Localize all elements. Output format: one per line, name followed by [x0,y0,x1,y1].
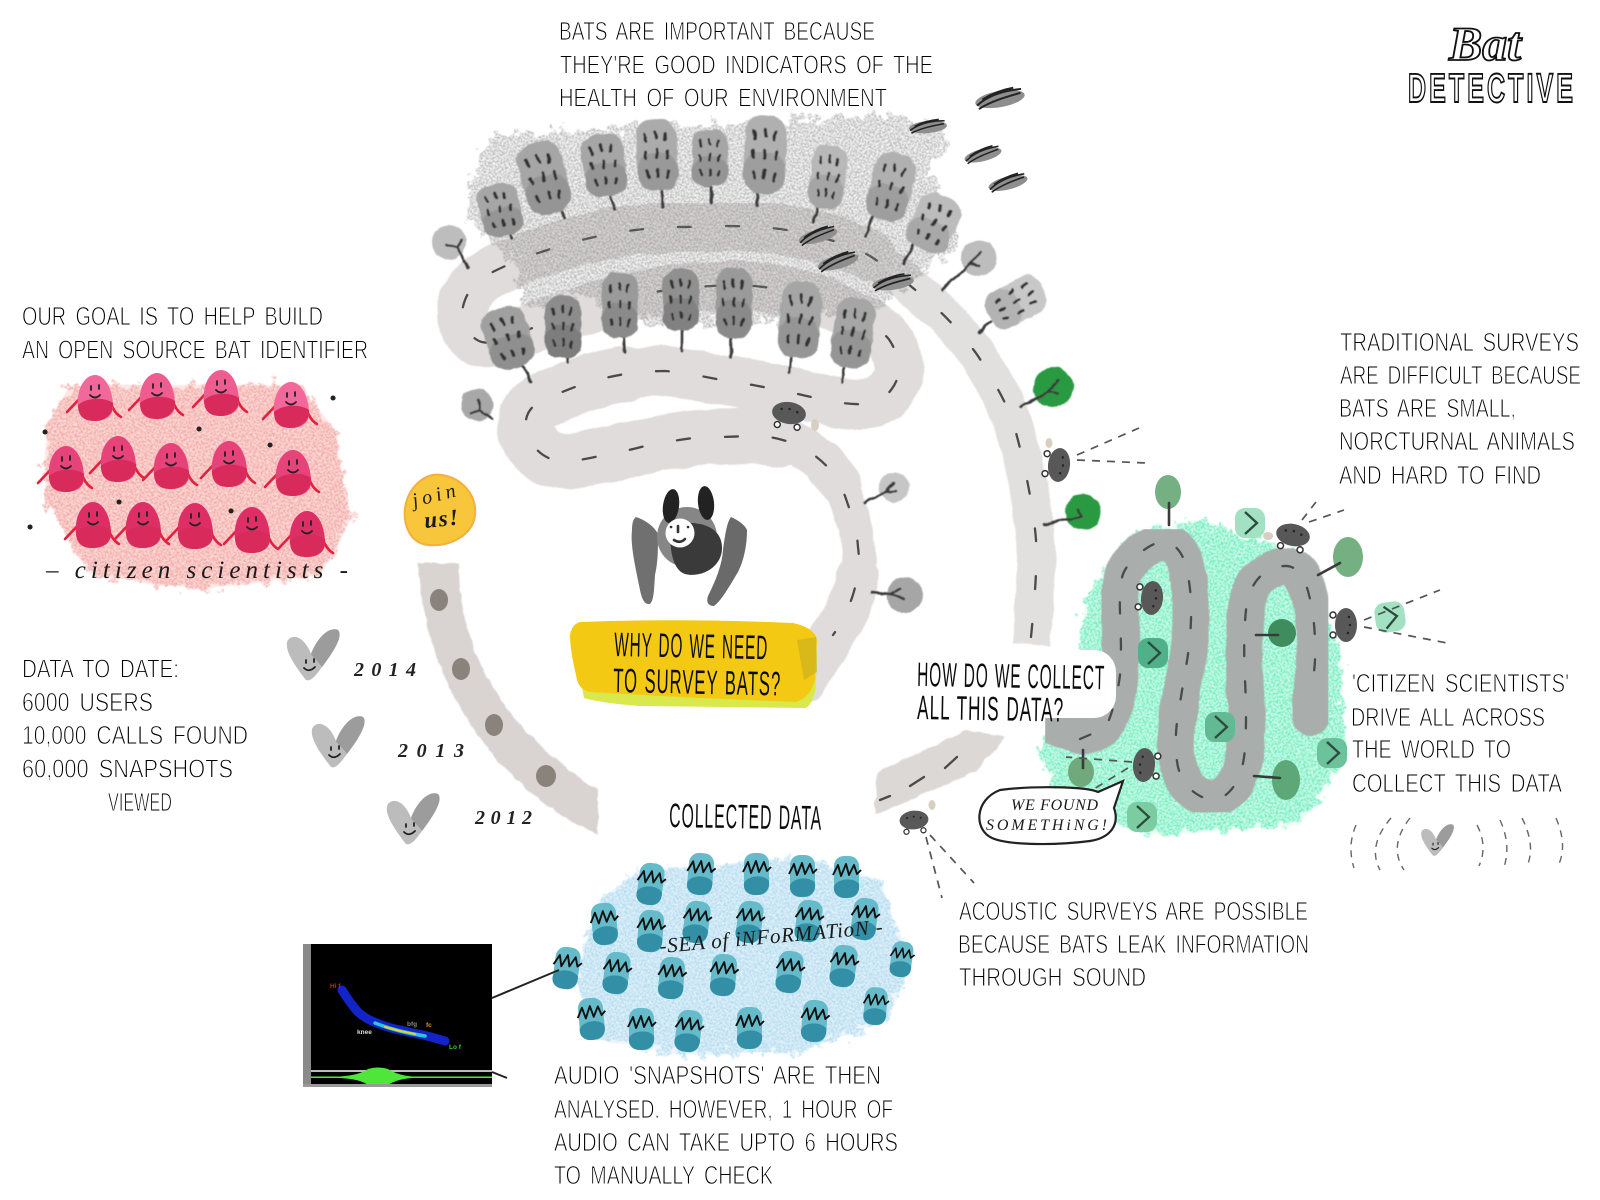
text: audio snapshots [554,1060,898,1190]
serpentine dashes [1080,542,1315,800]
snapshot 7 [635,909,667,953]
call curve heat [375,1023,425,1036]
snapshot 24 [862,986,890,1026]
right ear [696,485,716,521]
road: top winding grey road [462,226,1036,680]
pink wash [45,385,350,590]
data heading: DATA TO DATE: [22,654,179,684]
badge blob [405,475,475,545]
acoustic line 2: BECAUSE BATS LEAK INFORMATION [958,929,1309,959]
cover behind collect heading [905,650,1116,718]
road stub dashes [880,757,957,800]
serpentine road [1058,542,1315,800]
bat 2014 [287,629,340,680]
snapshot 6 [589,902,621,946]
car on top road [770,400,819,431]
year 2014: 2014 [353,659,416,681]
tree 10 [980,270,1052,334]
road: tapering bend [763,436,840,483]
text: our goal [22,301,368,364]
person 1 [67,375,121,421]
tree a [477,302,539,374]
timeline road [418,563,598,835]
call curve hot core [385,1027,415,1034]
panel: citizen scientists [30,370,350,590]
tree 6 [742,115,788,195]
green tree inner stem [1256,634,1278,636]
tree 1 [473,179,527,241]
years: bats by year [287,629,532,844]
collect line 2: ALL THIS DATA? [917,689,1065,730]
road stub shape [875,730,1006,813]
green pencil scribble [1040,520,1345,835]
divider band [311,1070,492,1072]
bat square 6 [1127,802,1157,832]
snapshot 8 [680,899,714,945]
tree 4 [635,118,679,192]
year dot 1 [430,589,448,611]
grey pencil scribble behind forest [465,115,955,327]
bubble line 1: WE FOUND [1011,797,1100,814]
green tree low right [1272,760,1300,800]
green tree low left stem [1082,750,1084,768]
green tree right [1333,537,1363,577]
flying bat 3 [963,144,1003,166]
waveform [311,1068,492,1086]
snapshot 3 [743,853,771,895]
line 1: BATS ARE IMPORTANT BECAUSE [559,16,875,46]
logo word Bat: Bat [1448,18,1523,71]
tree 3 [579,131,629,199]
right wing [707,517,747,606]
person 8 [201,441,255,487]
snapshot 17 [827,943,861,989]
car: inside serpentine [1135,580,1164,616]
flying bat 4 [987,171,1029,194]
year dot 2 [452,658,470,680]
timeline road with yearly dots [418,563,598,835]
audio line 4: TO MANUALLY CHECK [554,1160,773,1190]
year 2013: 2013 [397,740,464,762]
snapshot 19 [576,997,608,1041]
scattered dots [30,398,333,527]
small tree right stem [942,252,981,290]
drive line 2: DRIVE ALL ACROSS [1351,702,1545,732]
tree e [716,268,752,338]
small tree middle right stem [865,483,895,502]
spectrogram [303,944,492,1087]
snapshot 5 [833,856,861,898]
users: 6000 USERS [22,687,153,717]
acoustic line 1: ACOUSTIC SURVEYS ARE POSSIBLE [959,896,1308,926]
label Hi f: Hi f [330,983,341,990]
person 7 [143,443,197,489]
tree g [828,295,878,371]
text: data to date [22,654,248,817]
audio line 1: AUDIO 'SNAPSHOTS' ARE THEN [554,1060,881,1090]
forest: upper row of trees [473,115,1052,334]
small tree lower right stem [872,589,903,598]
text: acoustic surveys [958,896,1309,992]
bat square 3 [1138,638,1168,668]
caption sea of information: -SEA of iNFoRMATioN - [658,915,884,958]
snapshot 18 [888,940,916,979]
audio line 2: ANALYSED. HOWEVER, 1 HOUR OF [554,1094,893,1124]
road: upper loop section [462,226,899,404]
snapshot 11 [848,896,882,942]
person 4 [263,382,317,428]
small bat [1421,824,1454,856]
label Lo f: Lo f [449,1044,462,1051]
green tree inner [1268,619,1296,647]
year dot 4 [536,765,556,787]
year dot 3 [485,714,503,736]
tree trunks lower [520,325,845,382]
badge text us: us! [423,505,459,533]
tree d [663,269,699,331]
flying bat 1 [974,86,1026,111]
flying bat 7 [871,273,915,293]
exhaust puff serpentine [1263,532,1273,540]
panel: green survey area [1040,475,1407,835]
snapshot 23 [799,999,831,1043]
heading: how do we collect [917,656,1105,730]
snapshot 16 [773,949,807,995]
person 13 [224,507,278,553]
badge text join: join [407,480,458,513]
goal line 1: OUR GOAL IS TO HELP BUILD [22,301,323,331]
tree 2 [513,137,575,219]
bat square 4 [1205,712,1235,742]
nose and smile [671,526,688,542]
flying bat 6 [816,249,860,274]
person 14 [279,511,333,557]
lower road stub [875,730,1006,813]
snapshot 15 [708,953,740,997]
person 5 [38,446,92,492]
road centre dashes [462,226,1036,637]
bat square 2 [1373,600,1407,634]
label knee: knee [357,1029,372,1036]
car: right of serpentine [1330,608,1357,642]
car: lower road stub [899,809,930,835]
lower scale [303,1084,492,1087]
flying bat 2 [908,119,947,135]
icon: bat with sound waves [1351,818,1563,870]
flying bats: dark oval scribbles [797,86,1029,293]
small tree middle right [879,472,909,502]
road: lower wide section [526,374,779,462]
text: citizen scientists drive [1351,668,1569,798]
exhaust puff right road [1046,438,1052,448]
bubble line 2: SOMETHiNG! [986,817,1107,834]
spectrogram black panel [303,944,492,1087]
scale strip [303,944,311,1087]
snapshot 10 [792,898,826,944]
green tree low left [1068,757,1094,787]
snapshot 1 [634,861,668,907]
flying bat 5 [797,224,839,247]
person 12 [167,503,221,549]
bubble outline [979,781,1123,844]
line 2: THEY'RE GOOD INDICATORS OF THE [560,50,933,80]
green tree right stem [1318,563,1340,575]
green tree upper stem [1020,380,1058,407]
small tree left low [461,389,493,421]
car: right road [1041,446,1072,483]
connector lines from snapshot to spectrogram [492,970,559,1078]
road: end towards callout [805,577,857,680]
speech bubble: we found something [979,781,1123,844]
tree 5 [692,130,728,186]
central bat illustration [632,485,747,606]
drive line 3: THE WORLD TO [1352,734,1511,764]
tree 9 [902,187,966,259]
car: low serpentine [1132,747,1161,783]
green tree upper [1033,367,1073,407]
left wing [632,517,658,604]
snapshot 13 [600,950,634,996]
head [657,507,717,567]
forest: lower row of trees [477,268,878,382]
call curve blue [342,990,445,1041]
car: top of serpentine [1273,521,1312,554]
exhaust puff [811,419,819,431]
snapshot 14 [656,956,688,1000]
body [671,523,722,575]
left ear [661,488,681,524]
label fc: fc [426,1022,432,1029]
bat 2013 [312,716,365,767]
small tree left low stem [471,400,493,418]
callout: why do we need to survey bats [570,620,817,708]
small tree left top [432,225,466,259]
tree f [776,280,824,360]
green tree low right stem [1254,776,1280,778]
tree c [602,272,638,338]
yellow wash [570,620,817,702]
bat square 1 [1235,508,1265,538]
tree 8 [862,149,920,225]
panel: sea of information [550,852,916,1055]
person 2 [129,373,183,419]
small tree left top stem [446,240,468,268]
road overlap [797,637,817,680]
goal line 2: AN OPEN SOURCE BAT IDENTIFIER [22,334,368,364]
survey cones: dashed lines [926,428,1447,898]
person 10 [65,502,119,548]
snapshots: 60,000 SNAPSHOTS [22,754,233,784]
line 3: HEALTH OF OUR ENVIRONMENT [559,82,887,112]
text: COLLECTED DATA [669,797,823,838]
person 3 [193,370,247,416]
snapshot 4 [789,855,817,897]
heading text: bats are important [559,16,933,112]
snapshot 2 [685,852,717,896]
green tree top [1155,475,1181,509]
road: narrow section [831,471,859,577]
acoustic line 3: THROUGH SOUND [959,962,1146,992]
car body [770,400,807,431]
green wash [1040,520,1345,835]
bat 2012 [387,793,440,844]
viewed: VIEWED [108,787,172,817]
exhaust puff lower road [928,800,936,810]
badge: join us [405,475,475,545]
snapshot 20 [628,1008,656,1050]
snapshot 12 [550,945,584,991]
label bfg: bfg [407,1021,417,1028]
snapshot 22 [736,1007,764,1049]
text: HOW DO WE COLLECT [917,656,1105,697]
tree 7 [806,143,850,211]
traditional line 3: BATS ARE SMALL, [1339,393,1516,423]
audio line 3: AUDIO CAN TAKE UPTO 6 HOURS [554,1127,898,1157]
small tree right [961,240,997,276]
tree trunks [505,175,997,333]
green tree lower stem [1044,510,1082,524]
lime underlay [581,632,817,708]
traditional line 5: AND HARD TO FIND [1339,460,1541,490]
small roadside trees [432,225,1101,613]
green tree top stem [1168,503,1170,525]
face [666,518,694,548]
logo: Bat Detective [1408,18,1576,111]
sound waves [1351,818,1563,870]
green tree lower [1065,494,1101,530]
road: right descending section [823,238,1036,645]
pink pencil scribble [45,385,350,590]
person 9 [265,450,319,496]
blue wash [575,858,910,1055]
year 2012: 2012 [474,807,532,829]
person 6 [90,436,144,482]
callout: why do we need to survey bats: TO SURVEY BATS? [613,662,782,704]
tree b [545,296,581,358]
bat square 5 [1317,738,1347,768]
snapshot 21 [672,1008,706,1054]
callout: why do we need to survey bats: WHY DO WE NEED [614,626,769,667]
text: traditional surveys [1339,327,1581,490]
calls: 10,000 CALLS FOUND [22,720,248,750]
small tree lower right [887,577,923,613]
snapshot 9 [733,899,767,945]
person 11 [115,502,169,548]
blue pencil scribble [575,858,910,1055]
caption citizen scientists: – citizen scientists - [45,557,348,584]
